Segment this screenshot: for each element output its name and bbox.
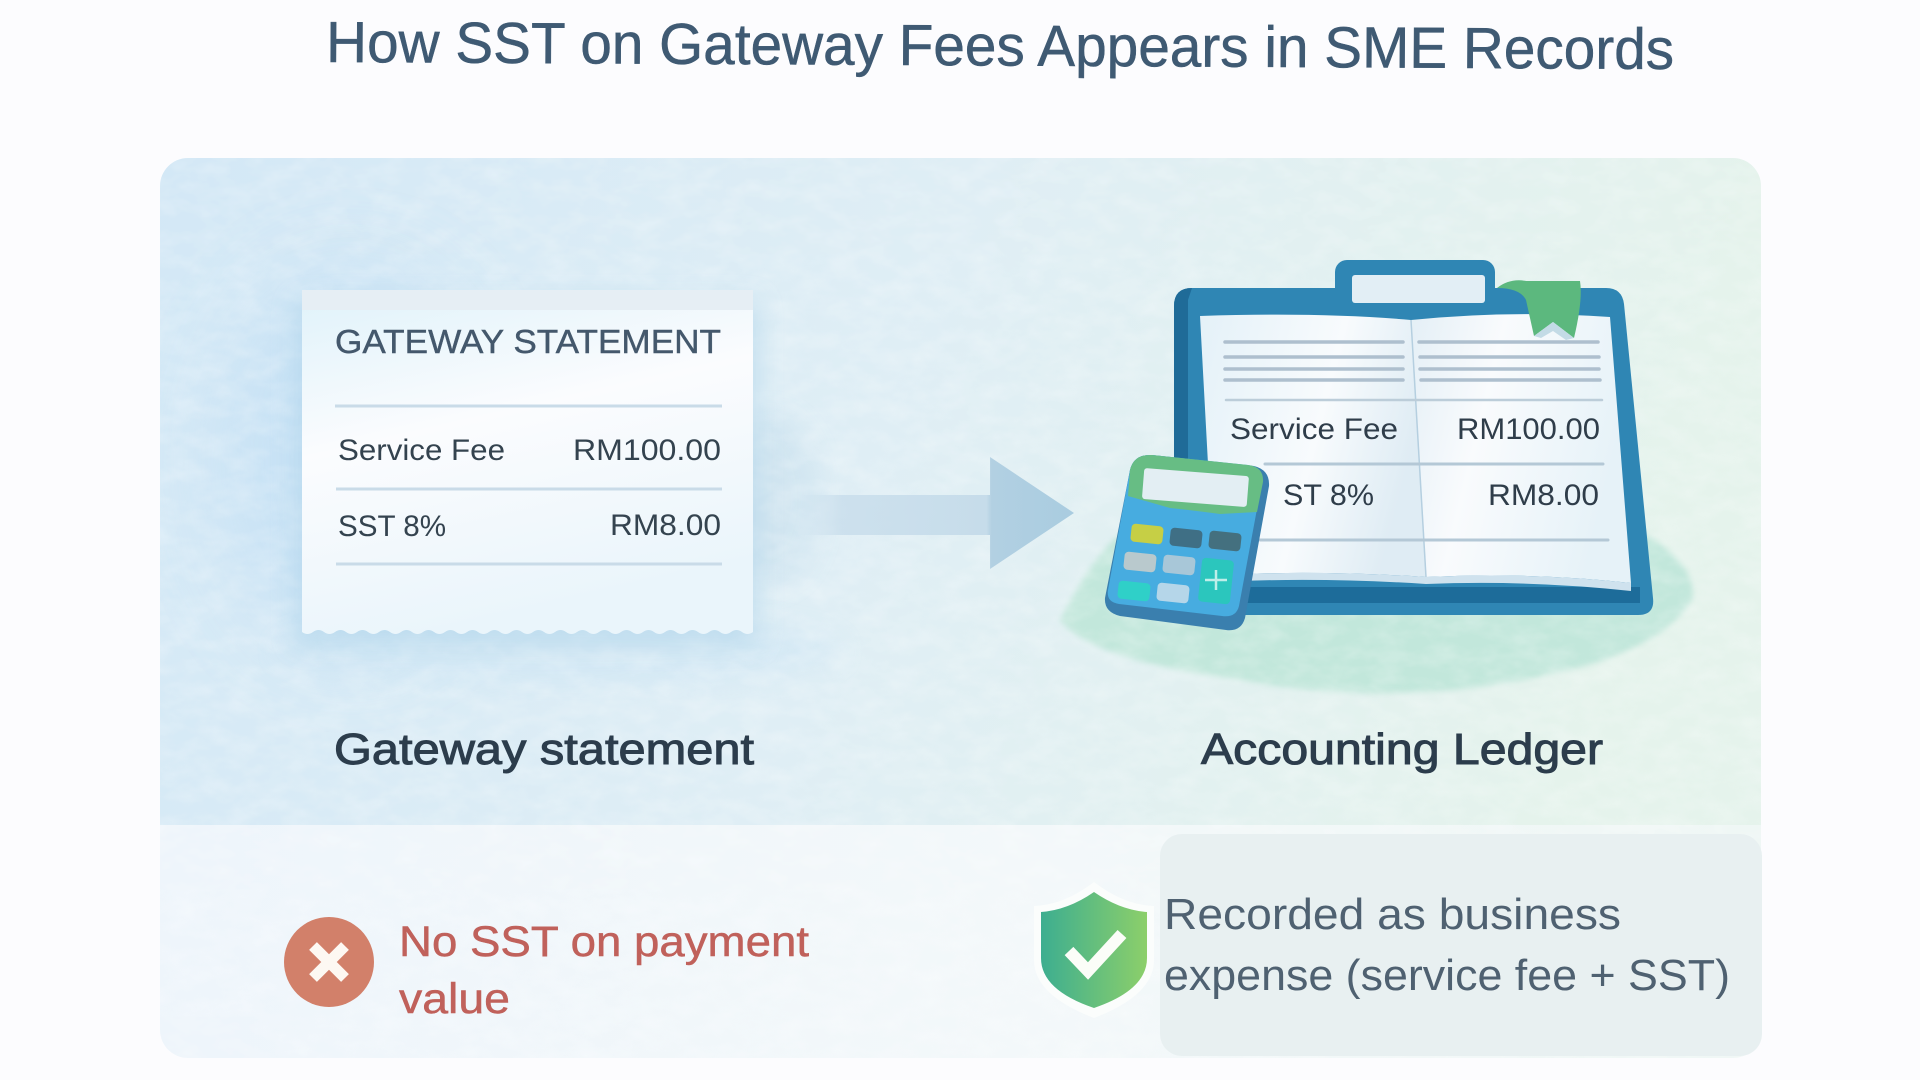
- panel: main flow background: [160, 158, 1761, 825]
- page ruled lines: [1225, 342, 1608, 540]
- callout box: [1160, 834, 1762, 1056]
- recorded text: Recorded as business: [1164, 890, 1621, 939]
- callout: recorded as business expense: [1034, 834, 1762, 1056]
- right page: [1411, 314, 1631, 583]
- receipt row: SST: RM8.00: [610, 509, 721, 542]
- left page: [1200, 315, 1426, 577]
- recorded text: expense (service fee + SST): [1164, 951, 1730, 1000]
- book cover: [1174, 288, 1653, 615]
- receipt row: service fee: Service Fee: [338, 434, 505, 467]
- title: How SST on Gateway Fees Appears in SME Records: [326, 10, 1674, 82]
- ledger row: SST: RM8.00: [1488, 479, 1599, 512]
- icon: red cross: [284, 917, 374, 1007]
- label: gateway statement: Gateway statement: [334, 725, 754, 774]
- receipt row: SST: [338, 509, 721, 543]
- receipt row: service fee: [338, 434, 721, 467]
- ledger row: service fee: RM100.00: [1457, 413, 1600, 446]
- arrow: statement to ledger: [800, 457, 1074, 569]
- label: accounting ledger: Accounting Ledger: [1201, 725, 1603, 774]
- ledger row: service fee: [1230, 413, 1600, 446]
- callout: no SST on payment value: [284, 917, 809, 1023]
- receipt: gateway statement: [296, 290, 758, 645]
- icon: open ledger book: [1174, 260, 1653, 615]
- receipt heading: GATEWAY STATEMENT: [335, 323, 721, 360]
- ledger row: service fee: Service Fee: [1230, 413, 1398, 446]
- panel: bottom notes background: [160, 825, 1761, 1058]
- receipt row: SST: SST 8%: [338, 510, 446, 543]
- icon: calculator: [1105, 455, 1269, 630]
- no SST text: No SST on payment: [399, 918, 809, 966]
- no SST text: [399, 918, 809, 1023]
- icon: green shield with check: [1034, 882, 1154, 1018]
- recorded text: [1164, 890, 1730, 1000]
- receipt row: service fee: RM100.00: [573, 434, 721, 467]
- ledger row: SST: ST 8%: [1283, 479, 1374, 512]
- ledger row: SST: [1283, 479, 1599, 512]
- book clip tab: [1335, 260, 1495, 325]
- no SST text: value: [399, 975, 510, 1023]
- bookmark: [1497, 280, 1581, 340]
